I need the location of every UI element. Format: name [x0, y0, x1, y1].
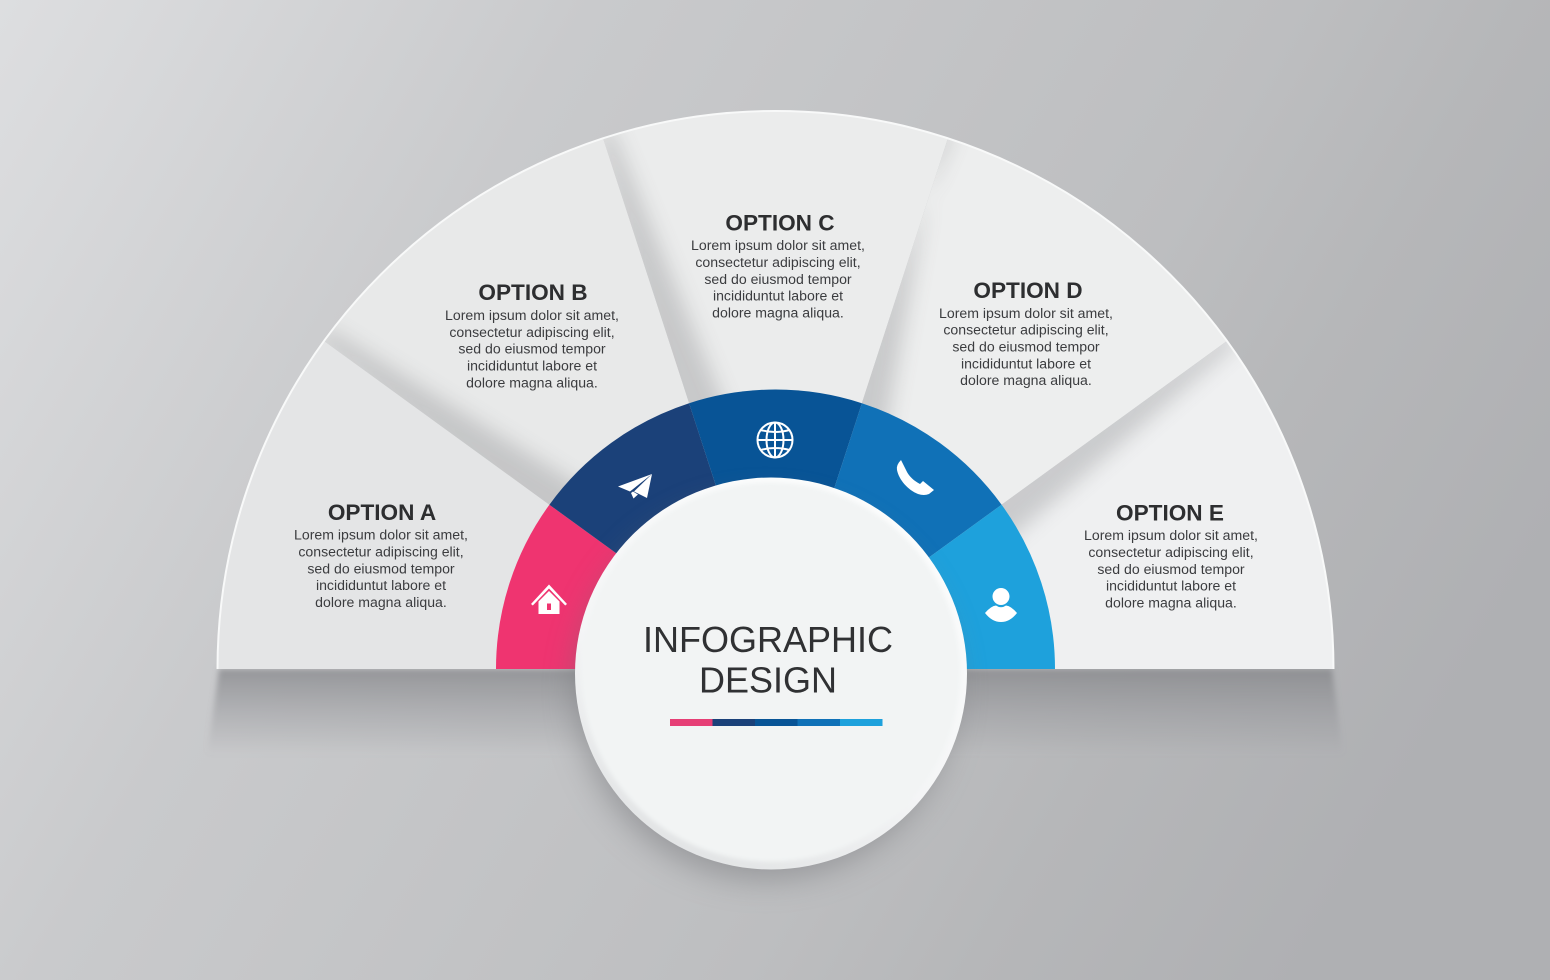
- ring segment: dark blue: [689, 390, 862, 669]
- central circle: [575, 478, 967, 879]
- text: option C: [691, 210, 865, 320]
- text: option E: consectetur adipiscing elit,: [1088, 544, 1254, 560]
- text: option A: incididuntut labore et: [316, 577, 446, 593]
- title: DESIGN: [699, 660, 837, 700]
- ring segment: pink: [496, 505, 776, 669]
- text: option C: sed do eiusmod tempor: [704, 271, 852, 287]
- fold shadow on option B: [325, 327, 575, 504]
- semicircle fan panel: [217, 110, 1334, 669]
- ring segment: mid blue: [776, 403, 1002, 669]
- colour bar: [670, 719, 882, 726]
- text: option E: sed do eiusmod tempor: [1097, 561, 1245, 577]
- ring segment: navy: [549, 403, 776, 669]
- text: option B: sed do eiusmod tempor: [458, 340, 606, 356]
- text: option E: incididuntut labore et: [1106, 578, 1236, 594]
- text: option B: incididuntut labore et: [467, 358, 597, 374]
- icon: person: [985, 588, 1017, 622]
- text: option A: OPTION A: [328, 500, 436, 525]
- fold shadow on option D: [862, 140, 956, 416]
- shadow under semicircle: [207, 669, 1343, 755]
- panel: option C sector: [603, 110, 948, 669]
- panel: option D sector: [776, 138, 1227, 669]
- icon: globe: [758, 422, 792, 458]
- text: option D: [939, 278, 1113, 388]
- circle drop shadow: [576, 501, 954, 879]
- icon: house: [531, 584, 567, 614]
- ring segment: light blue: [776, 505, 1055, 669]
- text: option E: Lorem ipsum dolor sit amet,: [1084, 527, 1258, 543]
- fold shadow on option E: [1002, 342, 1234, 538]
- title: INFOGRAPHIC: [643, 619, 893, 660]
- text: option C: dolore magna aliqua.: [712, 304, 844, 320]
- title: [643, 619, 893, 700]
- text: option A: sed do eiusmod tempor: [307, 560, 455, 576]
- text: option D: OPTION D: [973, 278, 1083, 303]
- text: option B: [445, 280, 619, 390]
- text: option B: consectetur adipiscing elit,: [449, 324, 615, 340]
- icon: telephone: [897, 460, 934, 495]
- coloured ring: [496, 390, 1055, 669]
- panel: option A sector: [217, 341, 776, 669]
- text: option A: [294, 500, 468, 610]
- circle face: [582, 482, 960, 862]
- text: option D: incididuntut labore et: [961, 356, 1091, 372]
- text: option A: dolore magna aliqua.: [315, 594, 447, 610]
- text: option B: OPTION B: [478, 280, 588, 305]
- text: option D: sed do eiusmod tempor: [952, 338, 1100, 354]
- text: option E: dolore magna aliqua.: [1105, 594, 1237, 610]
- text: option B: dolore magna aliqua.: [466, 374, 598, 390]
- text: option A: consectetur adipiscing elit,: [298, 544, 464, 560]
- text: option E: OPTION E: [1116, 500, 1224, 526]
- panel: option E sector: [776, 341, 1334, 669]
- icon: paper plane: [618, 474, 652, 498]
- text: option A: Lorem ipsum dolor sit amet,: [294, 526, 468, 542]
- text: option C: consectetur adipiscing elit,: [695, 254, 861, 270]
- panel: option B sector: [324, 138, 776, 669]
- text: option C: incididuntut labore et: [713, 288, 843, 304]
- text: option C: Lorem ipsum dolor sit amet,: [691, 237, 865, 253]
- text: option D: dolore magna aliqua.: [960, 372, 1092, 388]
- text: option D: consectetur adipiscing elit,: [943, 322, 1109, 338]
- text: option E: [1084, 500, 1258, 610]
- text: option B: Lorem ipsum dolor sit amet,: [445, 307, 619, 323]
- fold shadow on option C: [604, 134, 728, 404]
- white outer arc highlight: [218, 111, 1334, 669]
- circle rim: [575, 478, 967, 870]
- text: option C: OPTION C: [725, 210, 835, 236]
- text: option D: Lorem ipsum dolor sit amet,: [939, 305, 1113, 321]
